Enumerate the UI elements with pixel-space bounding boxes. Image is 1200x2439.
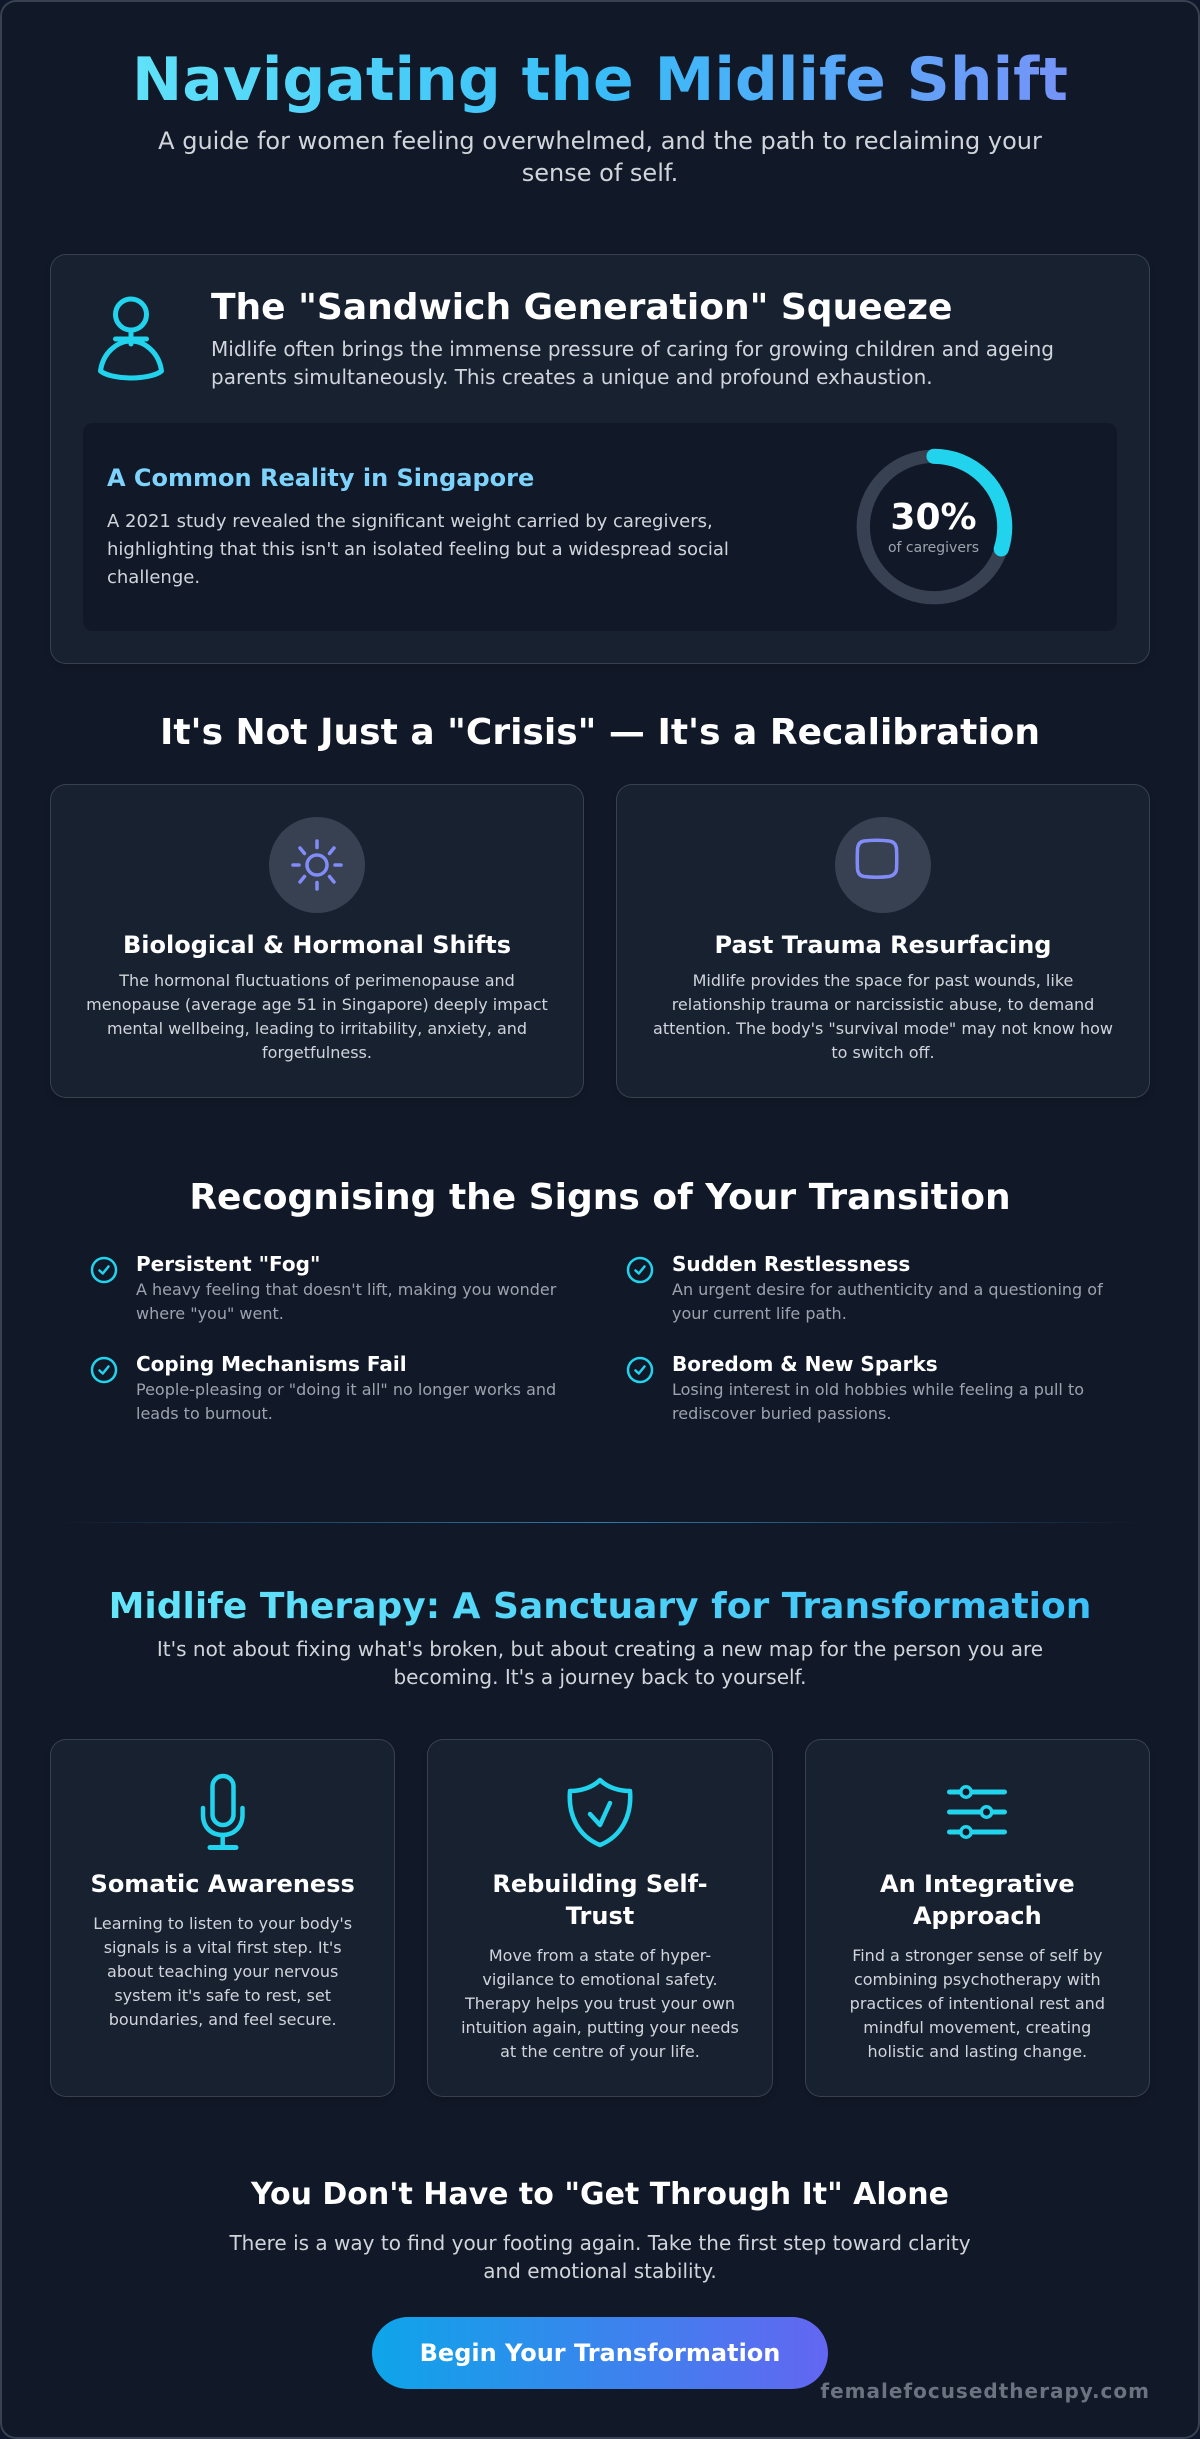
icon: microphone bbox=[200, 1774, 245, 1850]
text: sandwich description: parents simultaneously. This creates a unique and profound exhaustion. bbox=[211, 365, 933, 389]
card text: mindful movement, creating bbox=[863, 2018, 1091, 2037]
icon: person bbox=[98, 296, 164, 380]
heading: call to action: You Don't Have to "Get Through It" Alone bbox=[251, 2177, 949, 2212]
card text bbox=[461, 1946, 739, 2061]
text: study description: highlighting that this isn't an isolated feeling but a widespread social bbox=[107, 539, 729, 560]
sign title: Sudden Restlessness bbox=[672, 1252, 910, 1276]
heading: midlife therapy: Midlife Therapy: A Sanctuary for Transformation bbox=[109, 1586, 1091, 1626]
text: study description bbox=[107, 511, 729, 588]
card text: combining psychotherapy with bbox=[854, 1970, 1101, 1989]
icon: rounded square bbox=[835, 817, 931, 913]
text: therapy intro bbox=[157, 1637, 1043, 1689]
text: therapy intro: becoming. It's a journey back to yourself. bbox=[393, 1665, 807, 1689]
sign text: leads to burnout. bbox=[136, 1404, 273, 1423]
chart: 30 percent ring bbox=[856, 448, 1012, 604]
icon: shield bbox=[568, 1778, 632, 1848]
text: call to action: and emotional stability. bbox=[483, 2259, 717, 2283]
card text: Find a stronger sense of self by bbox=[852, 1946, 1102, 1965]
title: Navigating the Midlife Shift bbox=[132, 45, 1068, 115]
heading: Biological & Hormonal Shifts bbox=[123, 930, 511, 958]
text: therapy intro: It's not about fixing what's broken, but about creating a new map for the person you are bbox=[157, 1637, 1043, 1661]
card title bbox=[492, 1870, 708, 1930]
card text: intuition again, putting your needs bbox=[461, 2018, 739, 2037]
card text: Learning to listen to your body's bbox=[93, 1914, 352, 1933]
sign: sudden restlessness bbox=[626, 1252, 1104, 1323]
card title: Rebuilding Self- bbox=[492, 1870, 708, 1898]
subtitle: A guide for women feeling overwhelmed, and the path to reclaiming your bbox=[158, 127, 1042, 155]
text: study description: challenge. bbox=[107, 567, 200, 588]
panel: rebuilding self-trust bbox=[427, 1739, 773, 2097]
icon: check bbox=[90, 1356, 118, 1384]
card text: Move from a state of hyper- bbox=[489, 1946, 711, 1965]
sign text: People-pleasing or "doing it all" no longer works and bbox=[136, 1380, 556, 1399]
card text: signals is a vital first step. It's bbox=[104, 1938, 342, 1957]
subtitle: sense of self. bbox=[522, 159, 678, 187]
card title: An Integrative bbox=[880, 1870, 1075, 1898]
panel: common reality bbox=[83, 423, 1117, 631]
sign text: An urgent desire for authenticity and a questioning of bbox=[672, 1280, 1103, 1299]
card title: Trust bbox=[566, 1902, 634, 1930]
subtitle bbox=[158, 127, 1042, 187]
text: attention. The body's "survival mode" may not know how bbox=[653, 1018, 1113, 1038]
sign: coping mechanisms bbox=[90, 1352, 556, 1423]
button: begin your transformation bbox=[372, 2317, 828, 2389]
heading: singapore: A Common Reality in Singapore bbox=[107, 464, 534, 492]
sign text bbox=[136, 1380, 556, 1423]
icon: sun bbox=[269, 817, 365, 913]
sign text bbox=[672, 1380, 1084, 1423]
text: call to action: There is a way to find your footing again. Take the first step toward clarity bbox=[229, 2231, 971, 2255]
text: Midlife provides the space for past wounds, like bbox=[693, 970, 1073, 990]
button: begin your transformation: Begin Your Transformation bbox=[420, 2339, 780, 2367]
sign: boredom bbox=[626, 1352, 1084, 1423]
sign title: Persistent "Fog" bbox=[136, 1252, 320, 1276]
sign text: rediscover buried passions. bbox=[672, 1404, 891, 1423]
card text: holistic and lasting change. bbox=[868, 2042, 1087, 2061]
sign text: where "you" went. bbox=[136, 1304, 284, 1323]
panel: integrative approach bbox=[805, 1739, 1150, 2097]
card text: system it's safe to rest, set bbox=[114, 1986, 331, 2005]
card text: boundaries, and feel secure. bbox=[109, 2010, 337, 2029]
text: sandwich description: Midlife often brings the immense pressure of caring for growing children and ageing bbox=[211, 337, 1054, 361]
sign: persistent fog bbox=[90, 1252, 556, 1323]
text: to switch off. bbox=[831, 1042, 935, 1062]
heading: signs: Recognising the Signs of Your Transition bbox=[189, 1176, 1011, 1218]
panel: somatic awareness bbox=[50, 1739, 395, 2097]
text: menopause (average age 51 in Singapore) deeply impact bbox=[86, 994, 548, 1014]
sign text: Losing interest in old hobbies while feeling a pull to bbox=[672, 1380, 1084, 1399]
card title bbox=[880, 1870, 1075, 1930]
text bbox=[86, 970, 548, 1062]
text: sandwich description bbox=[211, 337, 1054, 389]
footer: website: femalefocusedtherapy.com bbox=[820, 2379, 1150, 2403]
card title: Somatic Awareness bbox=[91, 1870, 355, 1898]
card text bbox=[93, 1914, 352, 2029]
sign text bbox=[136, 1280, 556, 1323]
card text: Therapy helps you trust your own bbox=[465, 1994, 735, 2013]
panel: biological shifts bbox=[50, 784, 584, 1098]
stat label: of caregivers bbox=[888, 540, 979, 556]
card text bbox=[850, 1946, 1105, 2061]
heading: sandwich generation: The "Sandwich Generation" Squeeze bbox=[211, 286, 952, 328]
sign title: Boredom & New Sparks bbox=[672, 1352, 938, 1376]
sign text: your current life path. bbox=[672, 1304, 847, 1323]
heading: recalibration: It's Not Just a "Crisis" — It's a Recalibration bbox=[160, 712, 1040, 753]
icon: check bbox=[90, 1256, 118, 1284]
card text: practices of intentional rest and bbox=[850, 1994, 1105, 2013]
text: The hormonal fluctuations of perimenopause and bbox=[119, 970, 515, 990]
icon: sliders bbox=[947, 1785, 1007, 1839]
text bbox=[653, 970, 1113, 1062]
text: forgetfulness. bbox=[262, 1042, 372, 1062]
icon: check bbox=[626, 1356, 654, 1384]
panel: sandwich generation bbox=[50, 254, 1150, 664]
card title: Approach bbox=[913, 1902, 1042, 1930]
card text: at the centre of your life. bbox=[500, 2042, 700, 2061]
text: relationship trauma or narcissistic abuse, to demand bbox=[672, 994, 1094, 1014]
text: call to action bbox=[229, 2231, 971, 2283]
panel: past trauma bbox=[616, 784, 1150, 1098]
card text: about teaching your nervous bbox=[107, 1962, 338, 1981]
heading: Past Trauma Resurfacing bbox=[714, 930, 1051, 958]
sign text: A heavy feeling that doesn't lift, making you wonder bbox=[136, 1280, 556, 1299]
icon: check bbox=[626, 1256, 654, 1284]
sign title: Coping Mechanisms Fail bbox=[136, 1352, 407, 1376]
text: study description: A 2021 study revealed the significant weight carried by caregivers, bbox=[107, 511, 713, 532]
stat: 30%: 30% bbox=[890, 496, 977, 538]
sign text bbox=[672, 1280, 1104, 1323]
text: mental wellbeing, leading to irritability, anxiety, and bbox=[107, 1018, 527, 1038]
card text: vigilance to emotional safety. bbox=[482, 1970, 718, 1989]
